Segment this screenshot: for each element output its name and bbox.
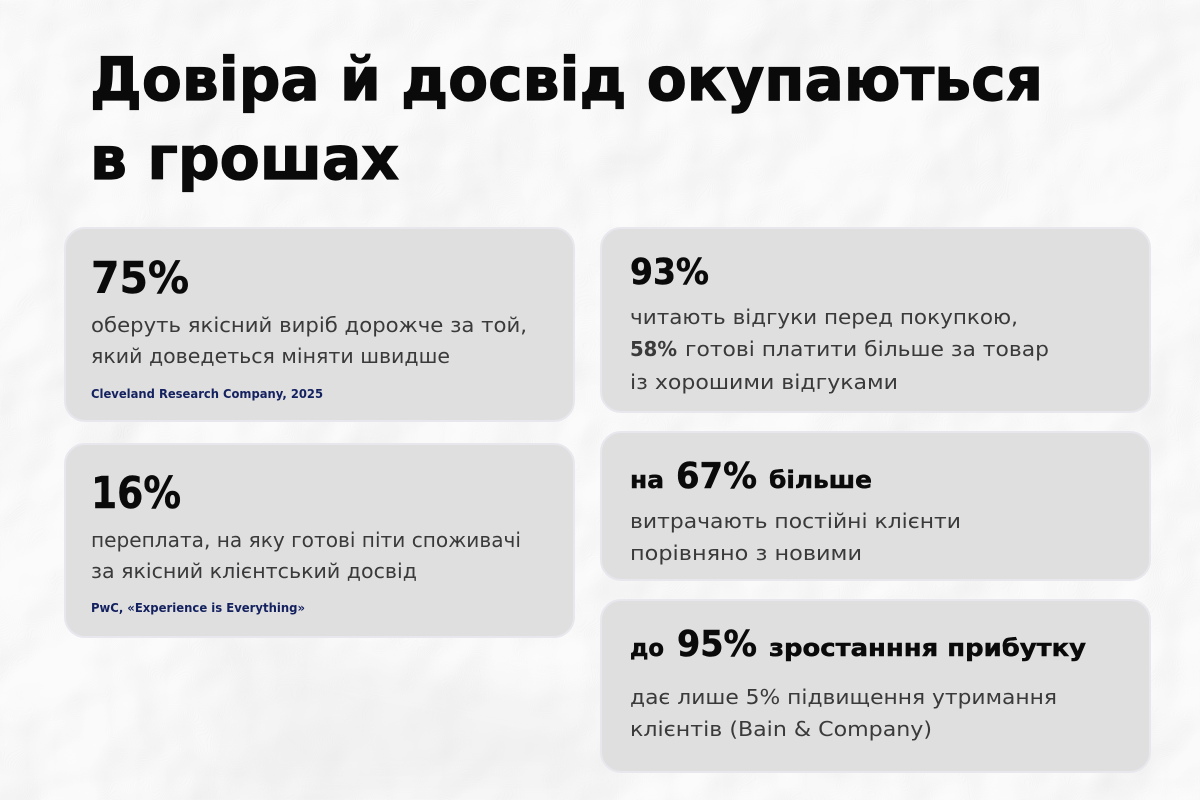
source: Cleveland: Cleveland Research Company, 2025 xyxy=(91,386,323,401)
description: 93%: 58% xyxy=(630,337,677,361)
panel: 75% xyxy=(65,228,574,421)
description: 93% xyxy=(630,305,1049,394)
description: 67% xyxy=(630,509,961,565)
panel: 95% xyxy=(601,600,1150,772)
stat: 95% зростання xyxy=(630,624,1086,665)
description: 93%: готові платити більше за товар xyxy=(685,337,1049,361)
panel: 16% xyxy=(65,444,574,637)
stat: 75%: 75% xyxy=(91,253,189,304)
description: 16% xyxy=(91,528,521,583)
description: 16%: за якісний клієнтський досвід xyxy=(91,559,417,583)
stat: 93%: 93% xyxy=(630,252,709,293)
stat: 16%: 16% xyxy=(91,468,181,519)
description: 95%: дає лише 5% підвищення утримання xyxy=(630,685,1057,709)
stat: 67% більше: на xyxy=(630,466,664,494)
description: 16%: переплата, на яку готові піти споживачі xyxy=(91,528,521,552)
description: 93%: читають відгуки перед покупкою, xyxy=(630,305,1018,329)
source: PwC: PwC, «Experience is Everything» xyxy=(91,600,305,615)
title xyxy=(90,45,1043,194)
stat: 95% зростання: 95% xyxy=(677,624,757,665)
panel: 93% xyxy=(601,228,1150,412)
description: 95%: клієнтів (Bain & Company) xyxy=(630,717,932,741)
stat: 95% зростання: до xyxy=(630,634,664,662)
panel: 67% xyxy=(601,432,1150,580)
description: 95% xyxy=(630,685,1057,741)
description: 75%: оберуть якісний виріб дорожче за той, xyxy=(91,313,527,337)
stat: 67% більше: більше xyxy=(769,466,872,494)
title: в грошах xyxy=(90,124,399,194)
stat: 95% зростання: зростанння прибутку xyxy=(769,634,1086,662)
description: 67%: витрачають постійні клієнти xyxy=(630,509,961,533)
description: 75%: який доведеться міняти швидше xyxy=(91,344,450,368)
description: 75% xyxy=(91,313,527,368)
stat: 67% більше: 67% xyxy=(676,456,757,497)
description: 93%: із хорошими відгуками xyxy=(630,370,898,394)
description: 67%: порівняно з новими xyxy=(630,541,862,565)
title: Довіра й досвід окупаються xyxy=(90,45,1043,115)
stat: 67% більше xyxy=(630,456,872,497)
